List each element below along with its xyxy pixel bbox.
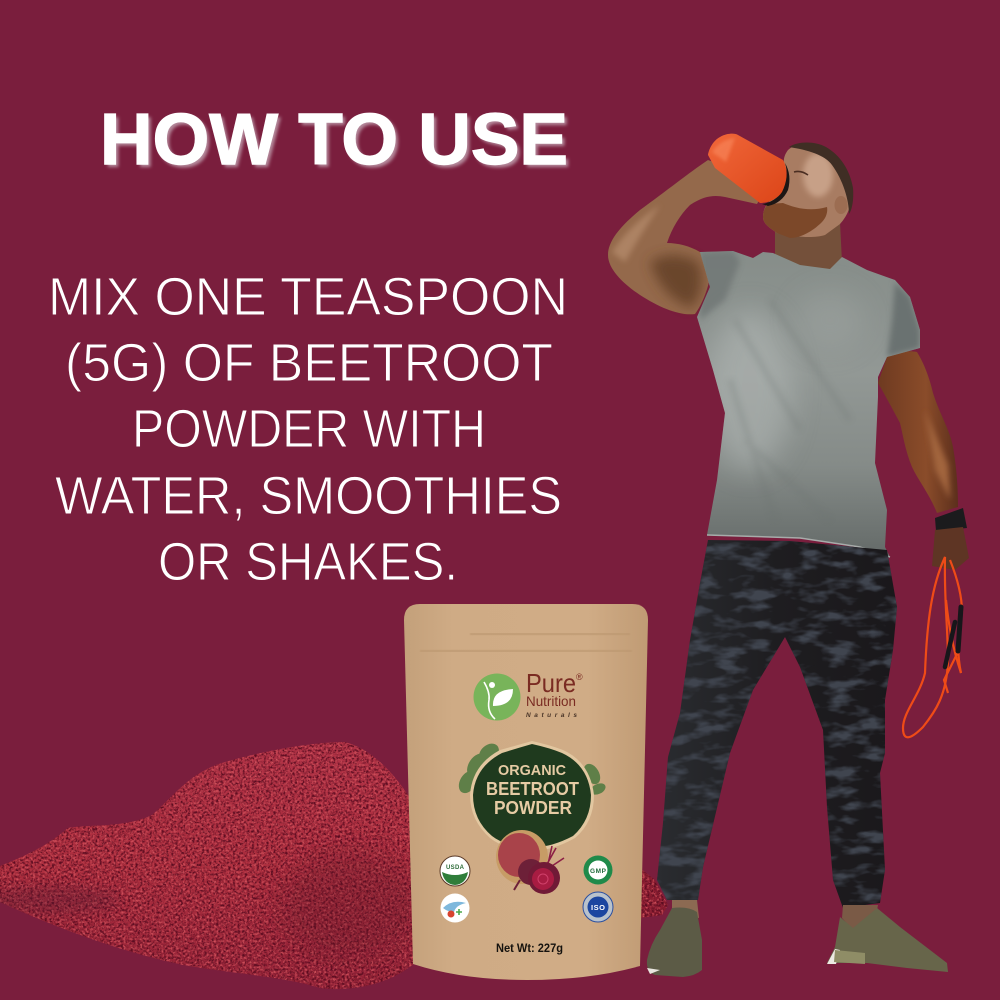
- shaker bottle: [708, 134, 789, 206]
- raised arm: [608, 160, 762, 314]
- white certification badge: [440, 894, 470, 922]
- heading: how to use: HOW TO USE: [103, 103, 571, 183]
- watch: [935, 508, 967, 531]
- pouch body: [404, 604, 648, 980]
- elbow highlight: [612, 205, 660, 262]
- instructions text block: [48, 267, 568, 592]
- bowl of powder: [496, 830, 548, 884]
- iso badge: ISO: [591, 903, 605, 912]
- t-shirt: [697, 251, 920, 557]
- right arm: [878, 351, 958, 513]
- usda organic badge: [440, 856, 470, 886]
- instructions text block: POWDER WITH: [132, 399, 486, 459]
- trousers: [657, 540, 897, 908]
- left shoe: [647, 900, 702, 977]
- product pouch: [404, 604, 648, 980]
- rope handles: [945, 607, 961, 667]
- arm muscle shading: [650, 255, 702, 308]
- brand logo: Naturals: [526, 712, 577, 719]
- label badge: POWDER: [494, 798, 572, 818]
- gmp badge: GMP: [590, 868, 607, 875]
- gmp badge: [584, 856, 612, 884]
- pouch seal lines: [420, 634, 632, 651]
- instructions text block: OR SHAKES.: [158, 532, 458, 592]
- beetroot: [514, 846, 564, 894]
- instructions text block: MIX ONE TEASPOON: [48, 267, 568, 327]
- brand logo: [474, 668, 583, 720]
- athlete drinking from shaker: [608, 134, 969, 977]
- leaves around label: [455, 740, 607, 797]
- iso badge: [583, 892, 613, 922]
- right shoe: [827, 905, 948, 972]
- skipping rope: [903, 557, 962, 737]
- neck and head: [763, 142, 853, 272]
- instructions text block: WATER, SMOOTHIES: [55, 466, 562, 526]
- beetroot powder pile: [0, 742, 668, 989]
- label badge: ORGANIC: [498, 762, 566, 779]
- hand: [932, 527, 969, 570]
- brand logo: ®: [576, 672, 583, 682]
- label badge: BEETROOT: [486, 779, 579, 799]
- brand logo: Nutrition: [526, 693, 576, 709]
- net weight: Net Wt: 227g: [496, 941, 563, 955]
- brand logo: Pure: [526, 668, 576, 698]
- heading: how to use: HOW TO USE: [100, 100, 568, 180]
- instructions text block: (5G) OF BEETROOT: [65, 333, 553, 393]
- forearm highlight: [925, 410, 950, 500]
- usda organic badge: USDA: [446, 865, 465, 871]
- label badge: [470, 741, 594, 850]
